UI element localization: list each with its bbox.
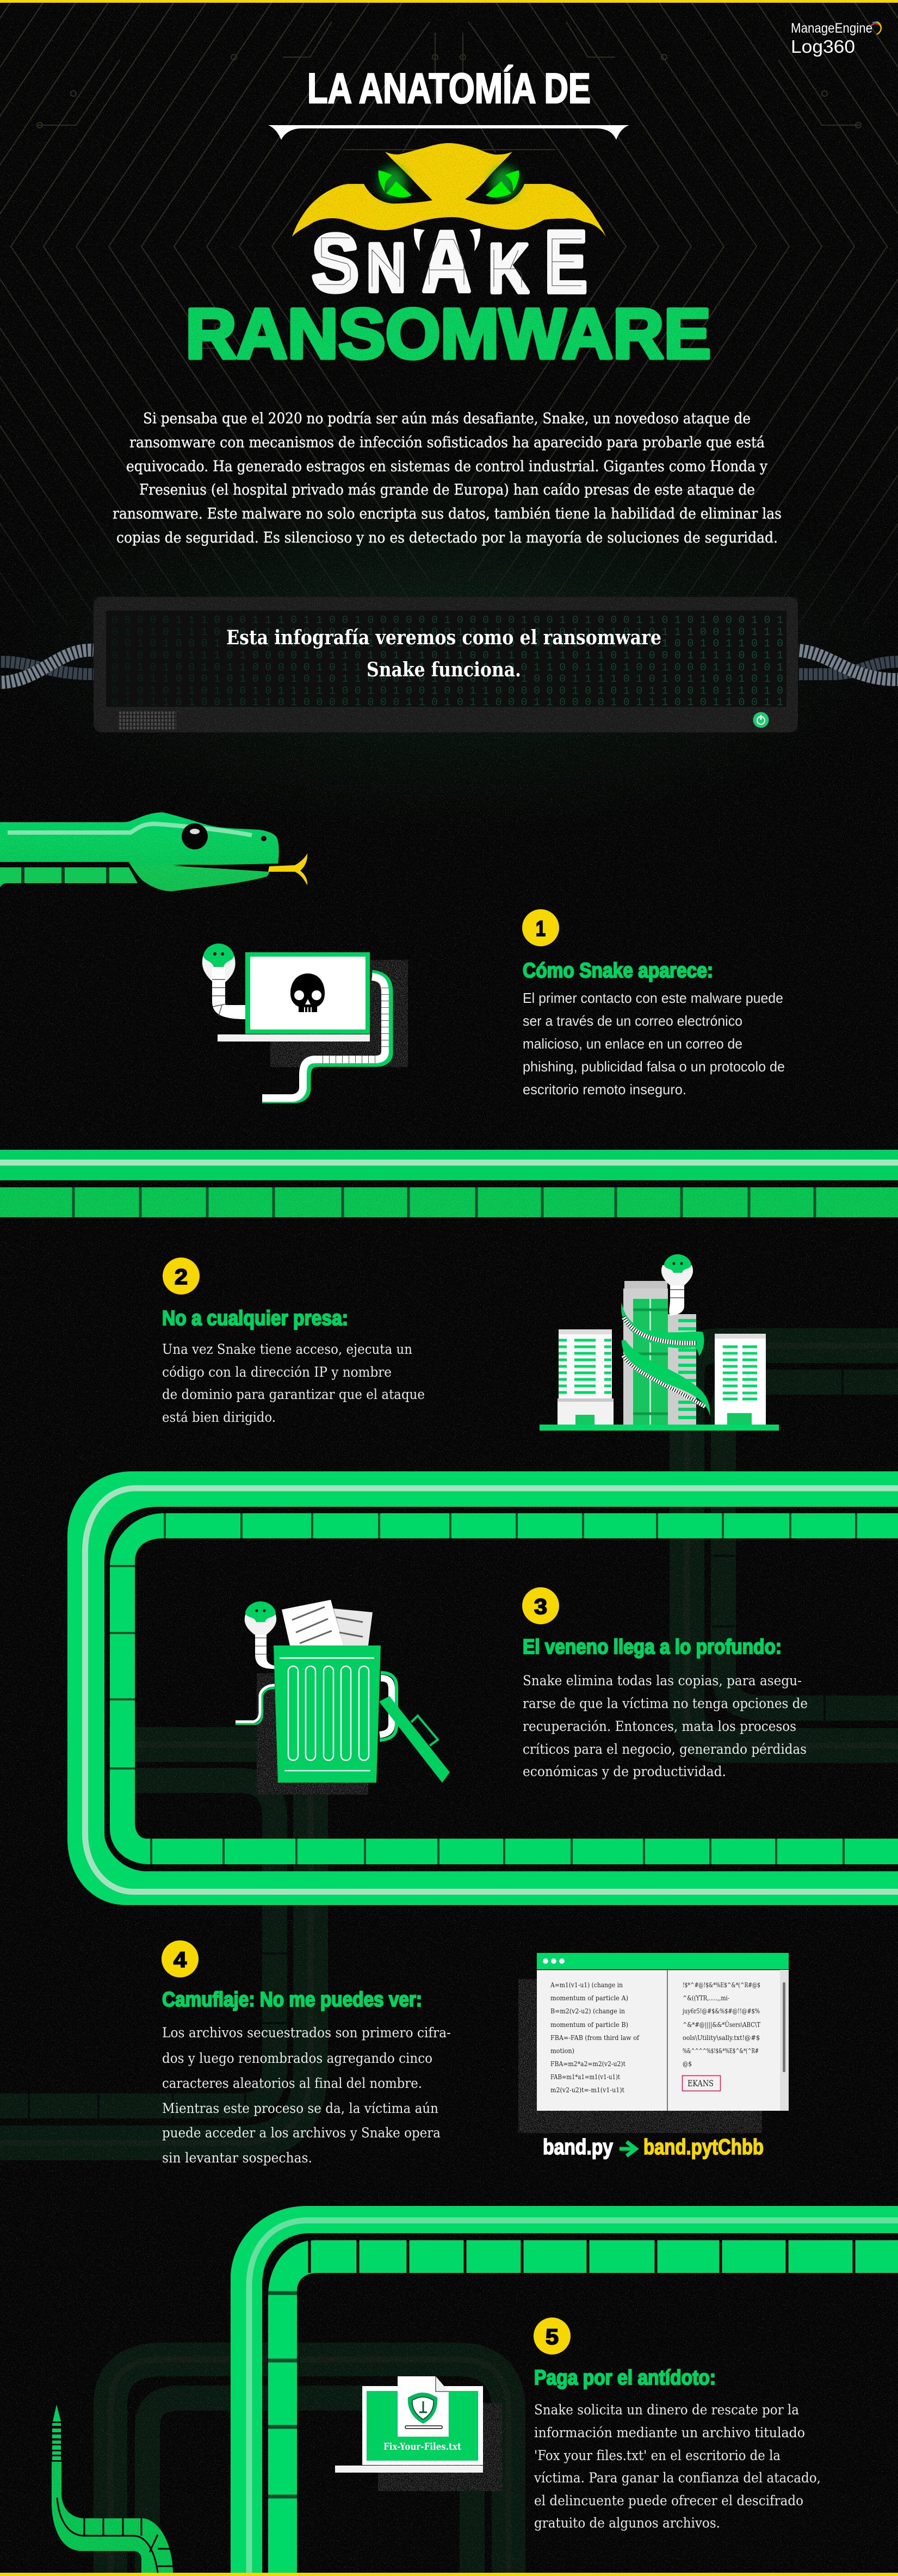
background faded pipes [0, 1346, 898, 2576]
step 4 [162, 1940, 789, 2166]
original file text: motion) [550, 2047, 574, 2055]
noise patch [378, 2403, 502, 2491]
logo: ManageEngine: ManageEngine [791, 21, 872, 36]
monitor message: Snake funciona. [367, 658, 521, 681]
encrypted file text [682, 1981, 761, 2068]
binary rain: 00000111000111011001000000100000100101000110101000101 [112, 614, 783, 627]
body 2 [162, 1341, 425, 1425]
noise patch [257, 1673, 368, 1795]
coil lower [622, 1340, 710, 1416]
body 3: Snake elimina todas las copias, para asegu- [523, 1673, 802, 1688]
icon: snake body [262, 972, 391, 1101]
icon: buildings [540, 1254, 779, 1431]
number badge 3 [522, 1587, 559, 1624]
intro text: copias de seguridad. Es silencioso y no es detectado por la mayoría de soluciones de seguridad. [116, 529, 778, 546]
ekans marker [682, 2075, 720, 2091]
body 2: está bien dirigido. [162, 1409, 276, 1425]
speaker grid [119, 713, 176, 728]
title: snake [312, 213, 587, 311]
body 4: Mientras este proceso se da, la víctima aún [162, 2100, 438, 2116]
body 3 [523, 1673, 808, 1779]
power button [753, 712, 769, 728]
number badge 1: 1 [536, 917, 546, 941]
title fang divider [268, 125, 629, 140]
step 5 [335, 2318, 821, 2531]
right building [715, 1334, 766, 1425]
title: snake: S [312, 217, 359, 309]
left eye [379, 170, 412, 198]
snake tail [52, 2405, 173, 2573]
body 3: recuperación. Entonces, mata los procesos [523, 1718, 796, 1734]
left building [558, 1329, 614, 1425]
number badge 5 [534, 2318, 571, 2355]
bottom yellow bar [0, 2573, 898, 2576]
icon: laptop with ransom note [335, 2376, 483, 2473]
title: snake: N [367, 230, 406, 306]
body 2: de dominio para garantizar que el ataque [162, 1386, 425, 1402]
body 4: sin levantar sospechas. [162, 2150, 312, 2166]
icon: cobra [236, 1601, 277, 1724]
intro text: ransomware con mecanismos de infección sofisticados ha aparecido para probarle que está [129, 434, 765, 451]
body 5 [534, 2402, 821, 2531]
body 3: económicas y de productividad. [523, 1764, 726, 1779]
number badge 4 [162, 1940, 199, 1977]
cables [0, 650, 898, 682]
binary rain: 01010111000110100000110110010110101011010101110010111 [112, 626, 783, 639]
title: ransomware: RANSOMWARE [185, 294, 711, 373]
snake body band 1 [0, 1150, 898, 1217]
snake pipe bottom [231, 2206, 898, 2573]
title: snake: A [422, 214, 471, 310]
intro text: Si pensaba que el 2020 no podría ser aún más desafiante, Snake, un novedoso ataque de [143, 410, 751, 427]
title: snake: E [544, 213, 587, 311]
intro text: equivocado. Ha generado estragos en sistemas de control industrial. Gigantes como Honda y [126, 458, 768, 475]
encrypted file text: juy6r5!@#$&%$#@!!@#$% [682, 2007, 760, 2015]
original file text: A=m1(v1-u1) (change in [550, 1981, 623, 1989]
number badge 1 [522, 909, 559, 946]
original file text: m2(v2-u2)t=-m1(v1-u1)t [550, 2086, 624, 2094]
icon: papers [282, 1600, 373, 1646]
binary rain: 01010110100101111100101001001100000010101011001011010 [112, 685, 783, 698]
body 1: ser a través de un correo electrónico [523, 1013, 742, 1029]
body 2: código con la dirección IP y nombre [162, 1364, 392, 1380]
body 1: malicioso, un enlace en un correo de [523, 1036, 742, 1052]
icon: laptop [218, 952, 370, 1042]
intro text: ransomware. Este malware no solo encripta sus datos, también tiene la habilidad de eliminar las [113, 506, 782, 522]
original file text: momentum of particle A) [550, 1994, 628, 2002]
body 4 [162, 2025, 451, 2166]
icon: cobra head [202, 944, 245, 1019]
body 2: Una vez Snake tiene acceso, ejecuta un [162, 1341, 412, 1357]
body 1: phishing, publicidad falsa o un protocolo de [523, 1058, 785, 1075]
number badge 4: 4 [174, 1948, 187, 1972]
green snake head [0, 812, 307, 891]
body 4: Los archivos secuestrados son primero cifra- [162, 2025, 451, 2041]
snake head shape [0, 812, 279, 891]
file window [537, 1953, 789, 2111]
body 3: críticos para el negocio, generando pérdidas [523, 1741, 807, 1757]
body 5: víctima. Para ganar la confianza del atacado, [534, 2470, 821, 2486]
original file text: FAB=m1*a1=m1(v1-u1)t [550, 2073, 620, 2081]
original file text: FBA=-FAB (from third law of [550, 2033, 640, 2042]
encrypted file text: ^&*#@||||&&*Ûsers\ABC\T [683, 2020, 761, 2029]
encrypted file text: @$ [683, 2060, 692, 2068]
mouth line [173, 865, 269, 872]
heading 5: Paga por el antídoto: [534, 2367, 716, 2389]
snake logo head [292, 143, 606, 237]
monitor [94, 597, 798, 732]
number badge 5: 5 [546, 2325, 559, 2349]
number badge 2: 2 [175, 1265, 188, 1289]
intro text [113, 410, 782, 546]
noise patch [270, 960, 408, 1067]
body 5: Snake solicita un dinero de rescate por la [534, 2402, 799, 2418]
step 2 [162, 1254, 779, 1431]
step 3 [236, 1587, 808, 1795]
body 5: el delincuente puede ofrecer el descifrado [534, 2493, 803, 2509]
number badge 3: 3 [534, 1595, 547, 1619]
body 5: 'Fox your files.txt' en el escritorio de la [534, 2448, 781, 2463]
cobra wrapped [621, 1254, 710, 1416]
file rename label [543, 2135, 764, 2159]
body 5: información mediante un archivo titulado [534, 2425, 805, 2441]
body 3: rarse de que la víctima no tenga opciones de [523, 1696, 808, 1711]
top yellow bar [0, 0, 898, 3]
nostril [261, 836, 267, 841]
icon: skull [290, 973, 325, 1012]
shield [408, 2393, 437, 2424]
eye [182, 823, 208, 849]
coil upper [621, 1303, 704, 1356]
filename: Fix-Your-Files.txt [383, 2441, 462, 2452]
original file text [550, 1981, 640, 2094]
icon: trash handle [380, 1673, 397, 1740]
file rename label: band.py [543, 2135, 614, 2159]
intro text: Fresenius (el hospital privado más grande de Europa) han caído presas de este ataque de [139, 482, 755, 498]
ground [540, 1425, 779, 1431]
snake belly [0, 867, 138, 887]
centre tower [623, 1281, 696, 1425]
encrypted file text: ^&((YTR,.....,,mi- [683, 1994, 729, 2002]
heading 2: No a cualquier presa: [162, 1307, 348, 1330]
icon: trash lid [379, 1696, 450, 1783]
snake frame pipe [67, 1471, 898, 1905]
body 4: puede acceder a los archivos y Snake opera [162, 2125, 441, 2141]
title: la anatomia de: LA ANATOMÍA DE [307, 64, 591, 112]
file rename label: band.pytChbb [643, 2135, 764, 2159]
arrow [620, 2142, 636, 2156]
encrypted file text: !$*^#@!$&*%E$^&*(^R#@$ [683, 1981, 760, 1989]
eye glow [380, 167, 518, 198]
heading 4: Camuflaje: No me puedes ver: [162, 1988, 422, 2011]
body 1: El primer contacto con este malware puede [523, 990, 783, 1006]
number badge 2 [163, 1258, 200, 1295]
monitor message: Esta infografía veremos como el ransomware [226, 626, 661, 649]
highlight stripe [8, 824, 252, 835]
ransom document [398, 2376, 449, 2437]
body 1 [523, 990, 785, 1098]
snake title inner lines and fangs [319, 229, 581, 287]
binary rain: 01011010010110100001000110101100011000010111010110011 [112, 697, 783, 709]
noise patch [518, 1979, 762, 2133]
body 1: escritorio remoto inseguro. [523, 1081, 686, 1098]
binary rain: 01011000101000101011000101100010100011110101011001010 [112, 673, 783, 686]
monitor message [226, 626, 661, 681]
binary rain: 01000011101000010110101110110011011101101100011110011 [112, 650, 783, 662]
logo: Log360: Log360 [791, 36, 855, 57]
icon: trash can [274, 1646, 381, 1783]
original file text: FBA=m2*a2=m2(v2-u2)t [550, 2060, 625, 2068]
logo [791, 21, 881, 57]
tongue [268, 853, 307, 885]
binary rain: 00101000110110010101100101010010100100110001001011010 [112, 638, 783, 650]
encrypted file text: %&^^^^%$!$&*%E$^&*(^R# [683, 2047, 759, 2055]
title: snake: K [488, 230, 529, 307]
body 4: dos y luego renombrados agregando cinco [162, 2050, 432, 2066]
heading 3: El veneno llega a lo profundo: [523, 1636, 782, 1659]
logo: arc [871, 22, 881, 34]
original file text: B=m2(v2-u2) (change in [550, 2007, 625, 2015]
right eye [486, 170, 519, 198]
encrypted file text: ools\Utility\sally.txt!@#$ [683, 2033, 760, 2042]
original file text: momentum of particle B) [550, 2020, 628, 2029]
step 1 [202, 909, 785, 1101]
heading 1: Cómo Snake aparece: [523, 959, 713, 982]
body 4: caracteres aleatorios al final del nombre. [162, 2075, 422, 2091]
binary rain [112, 614, 783, 709]
body 5: gratuito de algunos archivos. [534, 2515, 720, 2531]
ekans marker: EKANS [688, 2078, 714, 2088]
binary rain: 00101001011000001011000110101100011001101001000110101 [112, 662, 783, 674]
